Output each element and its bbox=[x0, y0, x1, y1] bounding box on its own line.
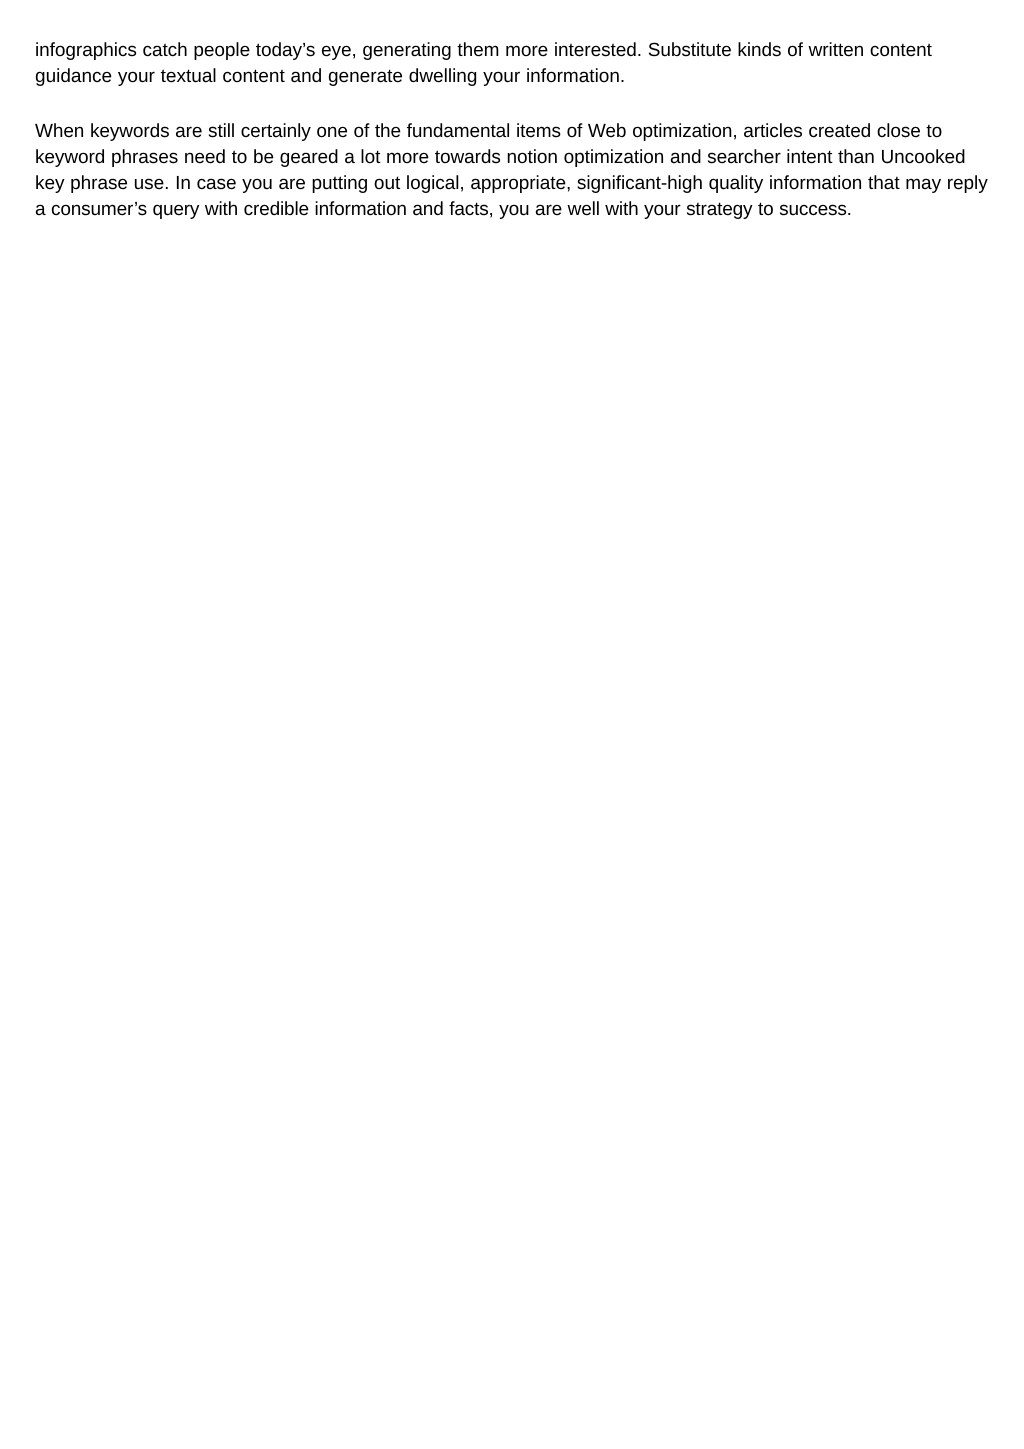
text block: first paragraph bbox=[35, 40, 932, 87]
text block: second paragraph: When keywords are still certainly one of the fundamental items of Web optimization, articles created close to bbox=[35, 121, 942, 142]
text block: second paragraph: keyword phrases need to be geared a lot more towards notion optimization and searcher intent than Uncooked bbox=[35, 147, 966, 168]
text block: second paragraph: a consumer’s query with credible information and facts, you are well with your strategy to success. bbox=[35, 199, 852, 220]
text block: second paragraph: key phrase use. In case you are putting out logical, appropriate, significant-high quality information that may reply bbox=[35, 173, 988, 194]
text block: first paragraph: guidance your textual content and generate dwelling your information. bbox=[35, 66, 625, 87]
text block: first paragraph: infographics catch people today’s eye, generating them more interested. Substitute kinds of written content bbox=[35, 40, 932, 61]
text block: second paragraph bbox=[35, 121, 988, 220]
